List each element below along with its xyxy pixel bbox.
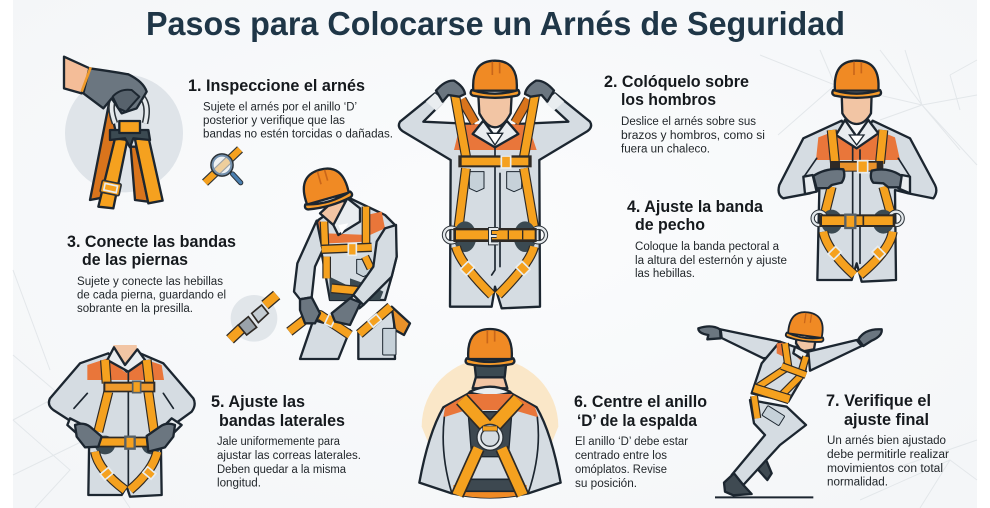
heading: step 1: 1. Inspeccione el arnés (188, 76, 365, 95)
text: step 5: Deben quedar a la misma (217, 464, 347, 476)
heading: step 2: 2. Colóquelo sobre (604, 72, 749, 91)
heading: step 4: 4. Ajuste la banda (627, 197, 764, 216)
illustration: step 4 person adjusting chest strap (779, 61, 936, 282)
heading: step 3 (67, 232, 236, 269)
text: step 6: omóplatos. Revise (575, 464, 667, 476)
heading: step 2: los hombros (621, 90, 716, 109)
heading: step 3: de las piernas (82, 250, 188, 269)
text: step 2 (621, 116, 765, 156)
title: Pasos para Colocarse un Arnés de Seguridad (146, 5, 845, 42)
heading: step 4 (627, 197, 764, 234)
heading: step 3: 3. Conecte las bandas (67, 232, 236, 251)
text: step 5: longitud. (217, 478, 261, 490)
text: step 1 (203, 102, 393, 140)
text: step 6: centrado entre los (575, 450, 667, 462)
text: step 7: movimientos con total (827, 463, 943, 475)
text: step 3: Sujete y conecte las hebillas (77, 276, 223, 288)
text: step 7 (827, 435, 949, 488)
heading: step 5: 5. Ajuste las (211, 392, 305, 411)
illustration: step 7 person running (698, 310, 882, 497)
illustration: step 1 hand holding harness (64, 57, 183, 208)
illustration: step 6 back view with D-ring (419, 329, 561, 498)
illustration: step 5 torso tightening side straps (49, 345, 195, 497)
text: step 2: fuera un chaleco. (621, 144, 710, 156)
text: step 4 (635, 241, 787, 280)
text: step 3 (77, 276, 226, 315)
text: step 5: ajustar las correas laterales. (217, 450, 361, 462)
text: step 6: su posición. (575, 478, 637, 490)
text: step 4: Coloque la banda pectoral a (635, 241, 780, 253)
icon: buckle (230, 295, 277, 342)
illustration: step 2 person raising harness (399, 61, 591, 308)
text: step 4: la altura del esternón y ajuste (635, 255, 787, 267)
heading: step 2 (604, 72, 749, 109)
illustration: step 3 person connecting leg straps (289, 163, 410, 359)
text: step 6: El anillo ‘D’ debe estar (575, 436, 688, 448)
text: step 3: de cada pierna, guardando el (77, 290, 226, 302)
text: step 7: Un arnés bien ajustado (827, 435, 946, 447)
text: step 5 (217, 436, 361, 490)
text: step 5: Jale uniformemente para (217, 436, 341, 448)
text: step 2: brazos y hombros, como si (621, 130, 765, 142)
heading: step 7 (826, 391, 931, 429)
heading: step 6 (574, 392, 707, 430)
heading: step 7: ajuste final (844, 410, 929, 429)
text: step 1: posterior y verifique que las (203, 115, 345, 127)
heading: step 7: 7. Verifique el (826, 391, 931, 410)
heading: step 6: 6. Centre el anillo (574, 392, 707, 411)
heading: step 4: de pecho (635, 215, 705, 234)
text: step 3: sobrante en la presilla. (77, 303, 193, 315)
text: step 4: las hebillas. (635, 268, 695, 280)
heading: step 5: bandas laterales (219, 411, 345, 430)
text: step 7: normalidad. (827, 476, 888, 488)
text: step 1: Sujete el arnés por el anillo ‘D’ (203, 102, 357, 114)
heading: step 5 (211, 392, 345, 430)
text: step 1: bandas no estén torcidas o dañadas. (203, 128, 393, 140)
icon: magnifier over strap (205, 149, 241, 183)
text: step 2: Deslice el arnés sobre sus (621, 116, 756, 128)
text: step 6 (575, 436, 688, 490)
text: step 7: debe permitirle realizar (827, 449, 949, 461)
heading: step 6: ‘D’ de la espalda (577, 411, 697, 430)
